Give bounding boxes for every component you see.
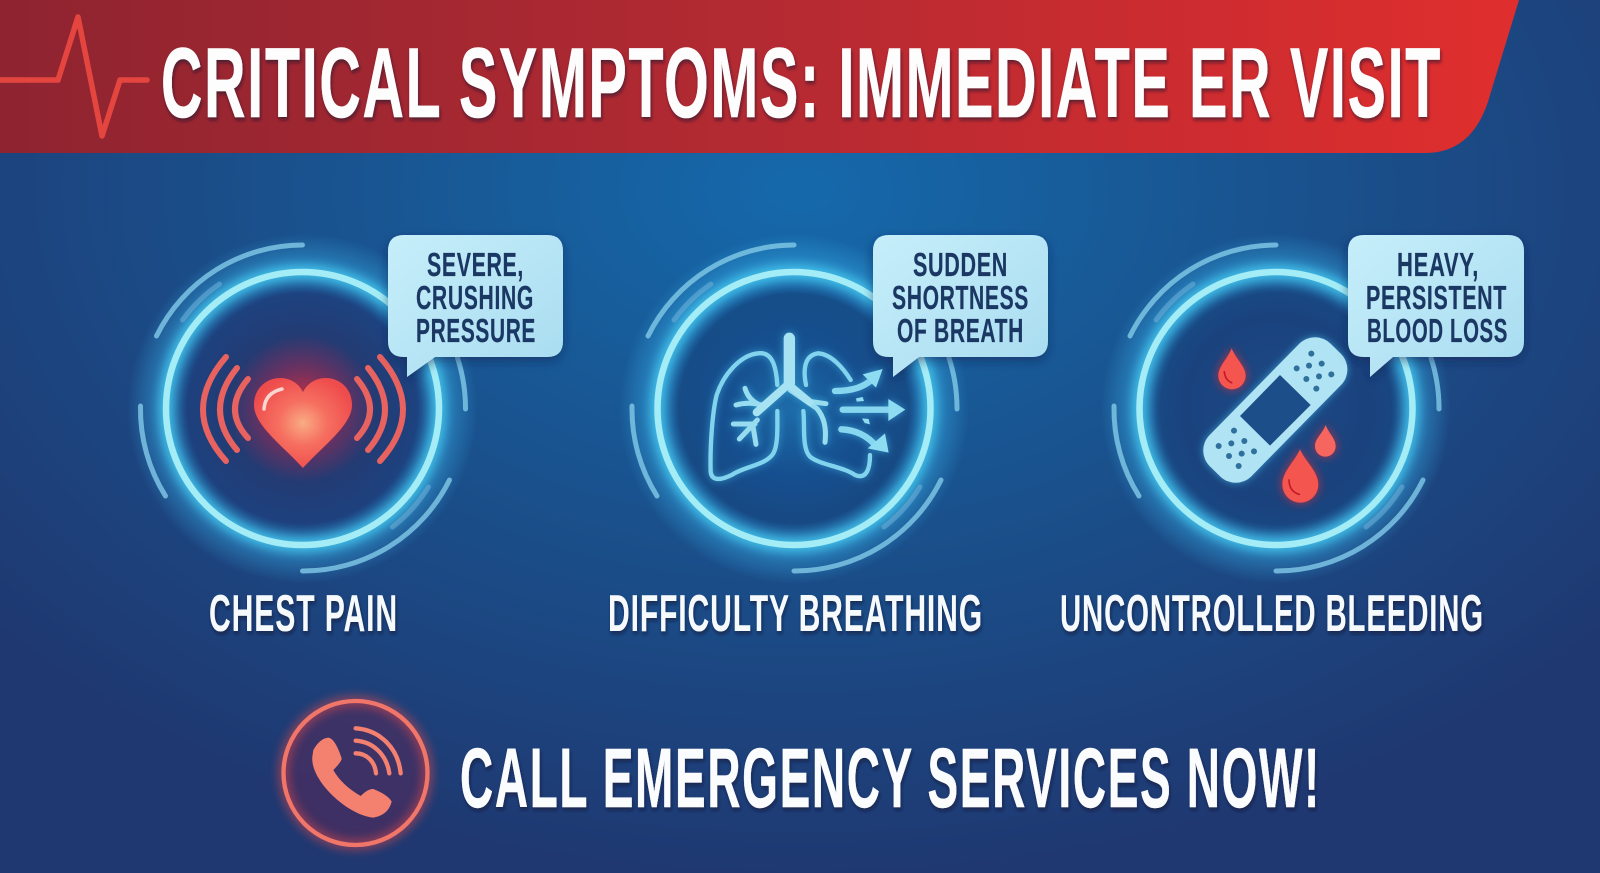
icon: bandage and blood drops	[1194, 328, 1357, 503]
speech bubble: sudden shortness of breath	[873, 235, 1048, 377]
speech bubble: severe crushing pressure: CRUSHING	[416, 280, 534, 317]
icon: heart with pulse waves	[203, 357, 403, 468]
label: chest pain: CHEST PAIN	[209, 585, 398, 643]
blood drops	[1218, 348, 1336, 503]
speech bubble: severe crushing pressure: SEVERE,	[427, 247, 524, 284]
speech bubble: heavy persistent blood loss: PERSISTENT	[1366, 280, 1507, 317]
icon: phone in red circle	[283, 701, 427, 845]
speech bubble: sudden shortness of breath: OF BREATH	[897, 313, 1024, 350]
panel: difficulty breathing	[608, 234, 1048, 643]
speech bubble: heavy persistent blood loss	[1348, 235, 1524, 377]
speech bubble: sudden shortness of breath: SHORTNESS	[892, 280, 1029, 317]
header banner	[0, 0, 1519, 153]
speech bubble: severe crushing pressure: PRESSURE	[416, 313, 536, 350]
label: difficulty breathing: DIFFICULTY BREATHING	[608, 585, 983, 643]
panel: chest pain	[128, 234, 563, 643]
icon: ECG heartbeat line	[0, 17, 147, 136]
panel: uncontrolled bleeding	[1060, 234, 1524, 643]
speech bubble: heavy persistent blood loss: HEAVY,	[1397, 247, 1479, 284]
speech bubble: heavy persistent blood loss: BLOOD LOSS	[1367, 313, 1508, 350]
icon: lungs with arrows	[711, 338, 905, 479]
speech bubble: sudden shortness of breath: SUDDEN	[913, 247, 1008, 284]
bandage	[1194, 328, 1357, 492]
blood drop glows	[1218, 348, 1336, 503]
speech bubble: severe crushing pressure	[388, 235, 563, 377]
